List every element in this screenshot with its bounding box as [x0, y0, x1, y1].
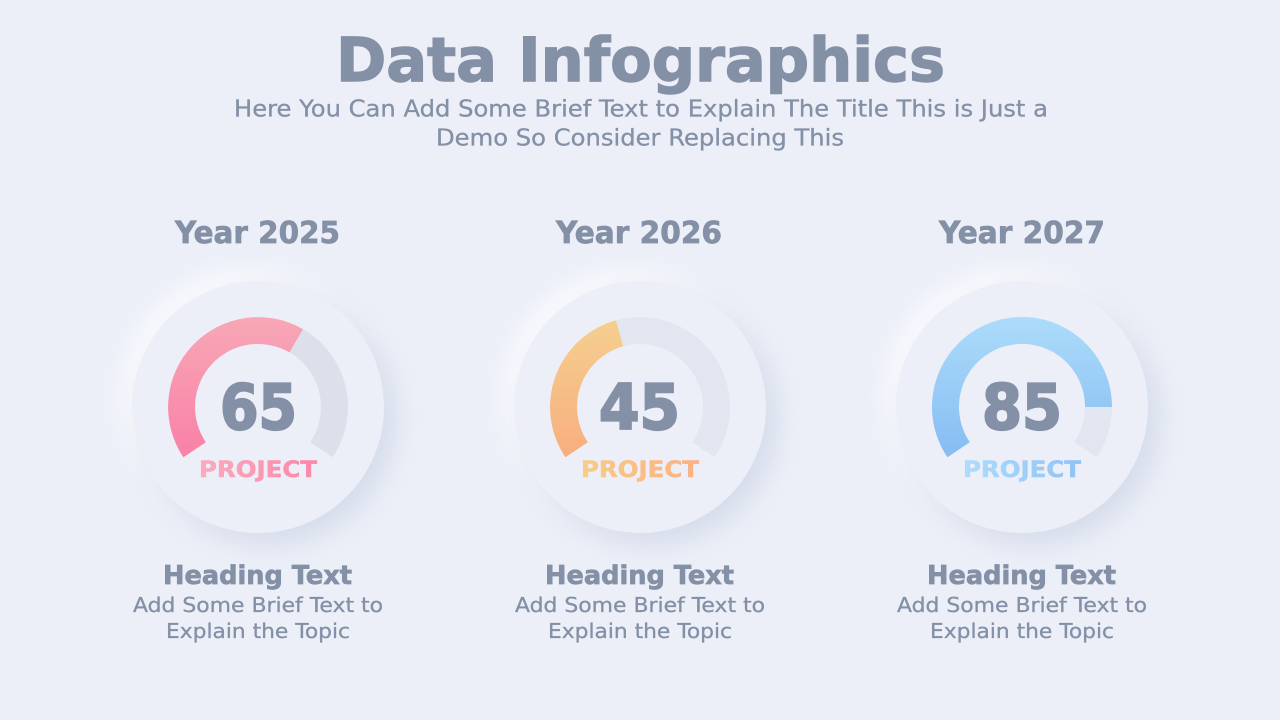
panel content 2027	[897, 216, 1147, 643]
panel: year 2025	[133, 216, 400, 643]
subtitle: Demo So Consider Replacing This	[436, 126, 844, 152]
value: 65	[220, 371, 297, 444]
value: 45	[599, 371, 680, 444]
year heading: Year 2027	[938, 216, 1105, 251]
subtitle: Here You Can Add Some Brief Text to Explain The Title This is Just a	[234, 96, 1048, 122]
disc	[132, 281, 384, 533]
disc	[514, 281, 766, 533]
year heading: Year 2025	[174, 216, 340, 251]
panel: year 2026	[515, 216, 782, 643]
description: Add Some Brief Text to	[133, 593, 383, 617]
description: Explain the Topic	[166, 619, 350, 643]
project label: PROJECT	[963, 458, 1081, 483]
description	[897, 593, 1147, 643]
subtitle	[234, 96, 1048, 152]
heading text: Heading Text	[545, 561, 734, 591]
description: Add Some Brief Text to	[897, 593, 1147, 617]
project label: PROJECT	[581, 458, 699, 483]
year heading: Year 2026	[555, 216, 722, 251]
header: title and subtitle	[234, 25, 1048, 152]
description: Explain the Topic	[548, 619, 732, 643]
description	[133, 593, 383, 643]
disc	[896, 281, 1148, 533]
description: Explain the Topic	[930, 619, 1114, 643]
description: Add Some Brief Text to	[515, 593, 765, 617]
heading text: Heading Text	[927, 561, 1116, 591]
title: Data Infographics	[336, 25, 945, 96]
description	[515, 593, 765, 643]
panel content 2025	[133, 216, 383, 643]
gauge 65	[168, 317, 348, 457]
value: 85	[982, 371, 1062, 444]
project label: PROJECT	[199, 458, 317, 483]
gauge 85	[932, 317, 1112, 457]
panel content 2026	[515, 216, 765, 643]
panel: year 2027	[897, 216, 1164, 643]
gauge 45	[550, 317, 730, 457]
heading text: Heading Text	[163, 561, 352, 591]
